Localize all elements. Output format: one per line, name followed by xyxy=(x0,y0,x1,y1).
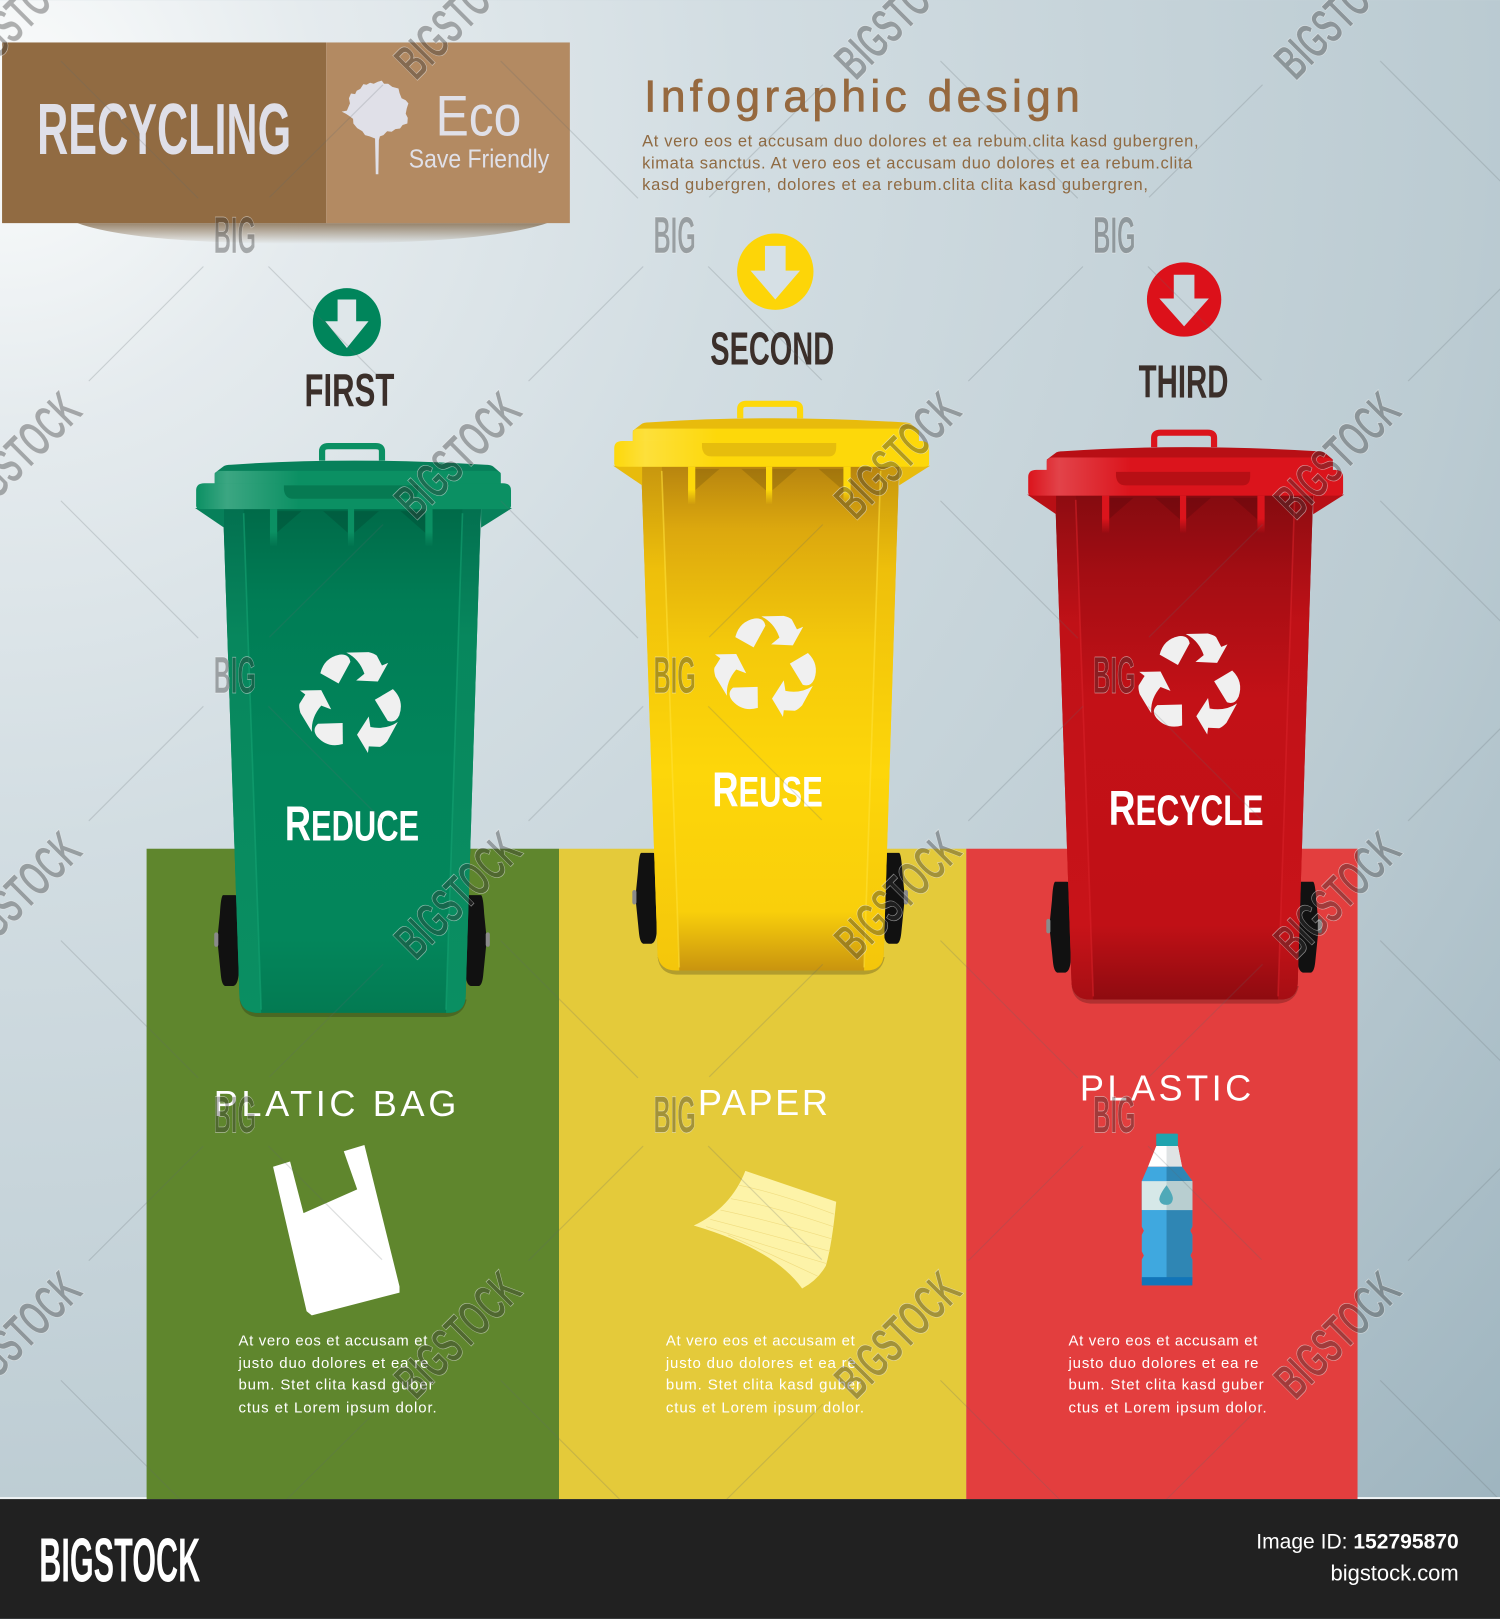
footer site: bigstock.com xyxy=(1331,1561,1459,1586)
text: yellow column: justo duo dolores et ea re xyxy=(665,1355,856,1372)
icon: recycle symbol red xyxy=(1130,633,1248,740)
heading: Infographic design xyxy=(644,73,1080,122)
icon: recycle symbol yellow xyxy=(706,616,824,722)
watermark: BIG marks: BIG xyxy=(214,646,256,704)
watermark: BIGSTOCK marks: BIGSTOCK xyxy=(384,1260,532,1409)
footer image id: Image ID: 152795870 xyxy=(1256,1531,1459,1554)
label: first: FIRST xyxy=(305,364,394,416)
panel heading: plastic: PLASTIC xyxy=(1080,1068,1251,1109)
watermark: BIG marks: BIG xyxy=(653,646,696,704)
label: recycle: RECYCLE xyxy=(1109,780,1264,836)
text: green column: At vero eos et accusam et xyxy=(238,1332,428,1349)
text: red column: justo duo dolores et ea re xyxy=(1067,1355,1258,1372)
bin: yellow reuse xyxy=(613,404,930,975)
text: green column: justo duo dolores et ea re xyxy=(237,1355,428,1372)
text: yellow column: ctus et Lorem ipsum dolor. xyxy=(666,1399,864,1416)
text: green column: bum. Stet clita kasd guber xyxy=(238,1377,434,1394)
icon: yellow down arrow xyxy=(737,233,813,310)
icon: green down arrow xyxy=(313,288,381,356)
bin: green reduce xyxy=(195,446,512,1017)
text: red column: At vero eos et accusam et xyxy=(1068,1332,1258,1349)
watermark: BIGSTOCK marks: BIGSTOCK xyxy=(823,381,972,529)
text: BIG xyxy=(1093,646,1136,704)
banner shadow xyxy=(77,223,547,244)
label: reduce: REDUCE xyxy=(285,795,419,851)
text: BIG xyxy=(1093,206,1136,264)
panel heading: platic bag: PLATIC BAG xyxy=(214,1083,456,1124)
watermark: BIGSTOCK marks: BIGSTOCK xyxy=(1263,820,1412,969)
eco tagline: Save Friendly xyxy=(409,145,549,173)
banner title: RECYCLING xyxy=(37,90,291,170)
footer bar xyxy=(0,1497,1500,1619)
intro text: kimata sanctus. At vero eos et accusam duo dolores et ea rebum.clita xyxy=(642,154,1193,172)
watermark: BIG marks: BIG xyxy=(214,1086,256,1144)
icon: red down arrow xyxy=(1147,262,1221,337)
icon: water bottle xyxy=(1142,1134,1192,1285)
watermark: BIG marks: BIG xyxy=(214,206,256,264)
watermark: BIGSTOCK marks: BIGSTOCK xyxy=(1263,381,1412,529)
eco label: Eco xyxy=(436,84,521,148)
panel heading: paper: PAPER xyxy=(698,1082,828,1123)
watermark: BIG marks xyxy=(214,206,1136,1144)
label: second: SECOND xyxy=(710,323,834,375)
watermark: BIG marks: BIG xyxy=(653,206,696,264)
footer bar: BIGSTOCK xyxy=(39,1527,200,1596)
watermark: BIGSTOCK marks: BIGSTOCK xyxy=(1263,1260,1412,1409)
header banner xyxy=(2,42,570,244)
intro text: kasd gubergren, dolores et ea rebum.clita clita kasd gubergren, xyxy=(642,176,1148,194)
watermark: BIGSTOCK marks: BIGSTOCK xyxy=(384,820,532,969)
watermark: BIGSTOCK marks: BIGSTOCK xyxy=(823,1260,972,1409)
text: red column: ctus et Lorem ipsum dolor. xyxy=(1068,1399,1267,1416)
text: yellow column: bum. Stet clita kasd guber xyxy=(666,1377,861,1394)
label: reuse: REUSE xyxy=(712,761,823,817)
text: BIG xyxy=(1093,1086,1136,1144)
icon: paper sheet xyxy=(694,1171,836,1289)
panel: colored columns xyxy=(147,849,1358,1499)
text: green column: ctus et Lorem ipsum dolor. xyxy=(238,1399,437,1416)
icon: plastic bag xyxy=(273,1145,400,1315)
intro text: At vero eos et accusam duo dolores et ea rebum.clita kasd gubergren, xyxy=(642,133,1199,151)
watermark: BIG marks: BIG xyxy=(653,1086,696,1144)
bin: red recycle xyxy=(1027,433,1344,1004)
watermark: BIGSTOCK marks: BIGSTOCK xyxy=(384,381,532,529)
text: red column: bum. Stet clita kasd guber xyxy=(1068,1377,1264,1394)
icon: recycle symbol green xyxy=(291,652,409,758)
icon: tree xyxy=(342,81,408,174)
label: third: THIRD xyxy=(1139,356,1228,408)
watermark: BIGSTOCK marks: BIGSTOCK xyxy=(823,820,972,969)
text: yellow column: At vero eos et accusam et xyxy=(666,1332,856,1349)
